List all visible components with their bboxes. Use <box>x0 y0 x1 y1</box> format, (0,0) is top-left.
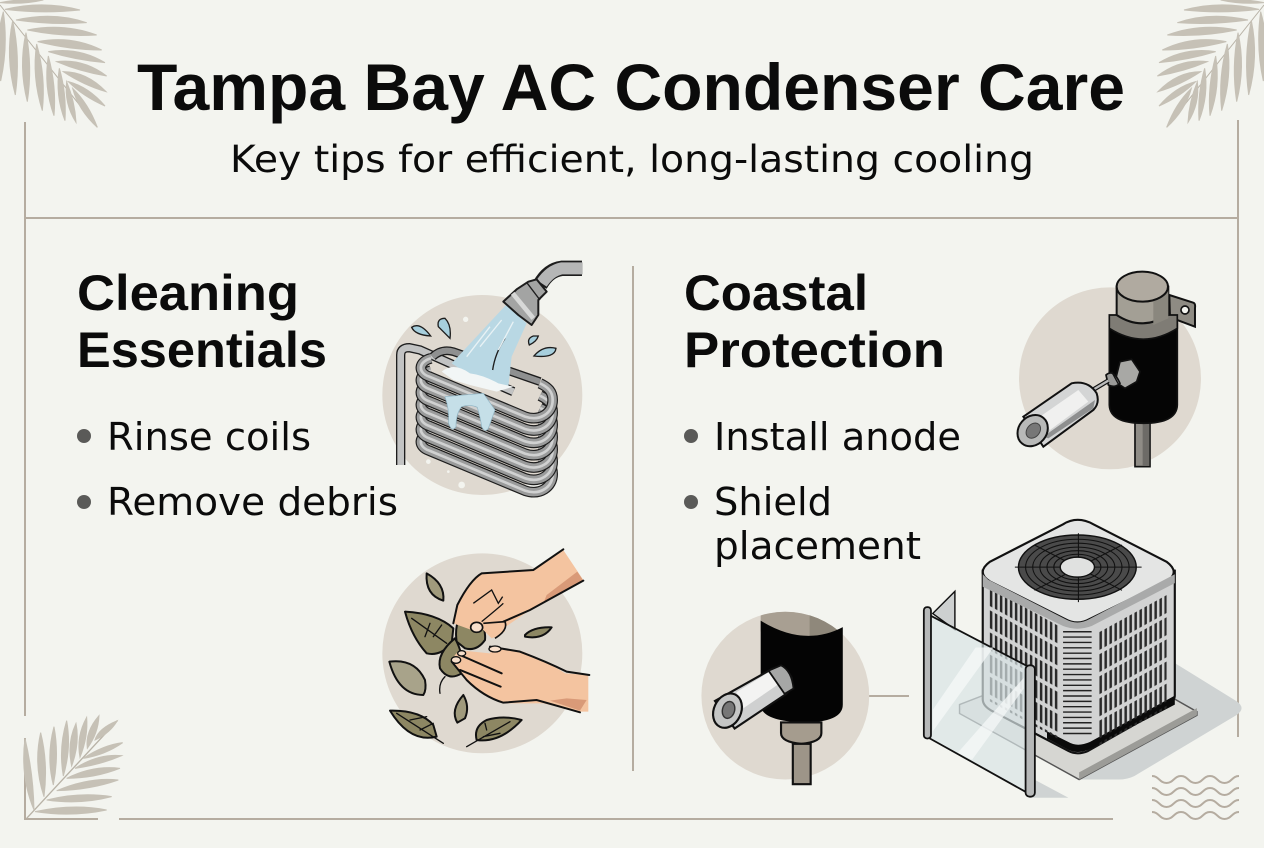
icon: rinsing coils with hose <box>382 260 584 495</box>
droplets <box>412 318 556 356</box>
title: Tampa Bay AC Condenser Care <box>137 50 1125 124</box>
decoration: palm frond top right <box>1157 0 1264 127</box>
water <box>452 305 527 387</box>
icon: hands removing leaves <box>382 549 589 753</box>
decoration: palm frond top left <box>0 0 107 127</box>
decoration: waves <box>1152 776 1239 819</box>
panel: coastal protection <box>684 265 1242 798</box>
frame lines <box>25 120 1238 819</box>
illustration: condenser unit with shield <box>924 520 1242 798</box>
icon: sacrificial anode on tank <box>1011 272 1201 469</box>
louvres <box>989 587 1059 739</box>
heading: cleaning essentials: Cleaning <box>77 265 299 321</box>
heading: coastal protection: Coastal <box>684 265 868 321</box>
decoration: palm frond bottom left <box>24 716 123 818</box>
connector line <box>869 695 909 697</box>
shield <box>933 591 955 630</box>
lid <box>983 520 1174 622</box>
heading: coastal protection <box>684 265 945 378</box>
bullet list: coastal <box>684 415 961 568</box>
nozzle <box>540 268 583 285</box>
panel: cleaning essentials <box>77 260 589 753</box>
ground shadow <box>1079 664 1242 780</box>
heading: cleaning essentials: Essentials <box>77 322 327 378</box>
heading: coastal protection: Protection <box>684 322 945 378</box>
bullet list: coastal: Shield <box>714 480 832 524</box>
pipe <box>401 348 513 465</box>
cabinet <box>983 571 1175 753</box>
subtitle: Key tips for efficient, long-lasting cooling <box>230 138 1034 181</box>
bullet list: cleaning: Rinse coils <box>107 415 311 459</box>
bullet list: cleaning <box>77 415 398 524</box>
base plate <box>960 653 1197 780</box>
bullet list: coastal: placement <box>714 524 921 568</box>
fan grille <box>1018 535 1136 599</box>
bullet list: cleaning: Remove debris <box>107 480 398 524</box>
icon: anode close-up <box>701 603 869 784</box>
heading: cleaning essentials <box>77 265 327 378</box>
bullet list: coastal: Install anode <box>714 415 961 459</box>
